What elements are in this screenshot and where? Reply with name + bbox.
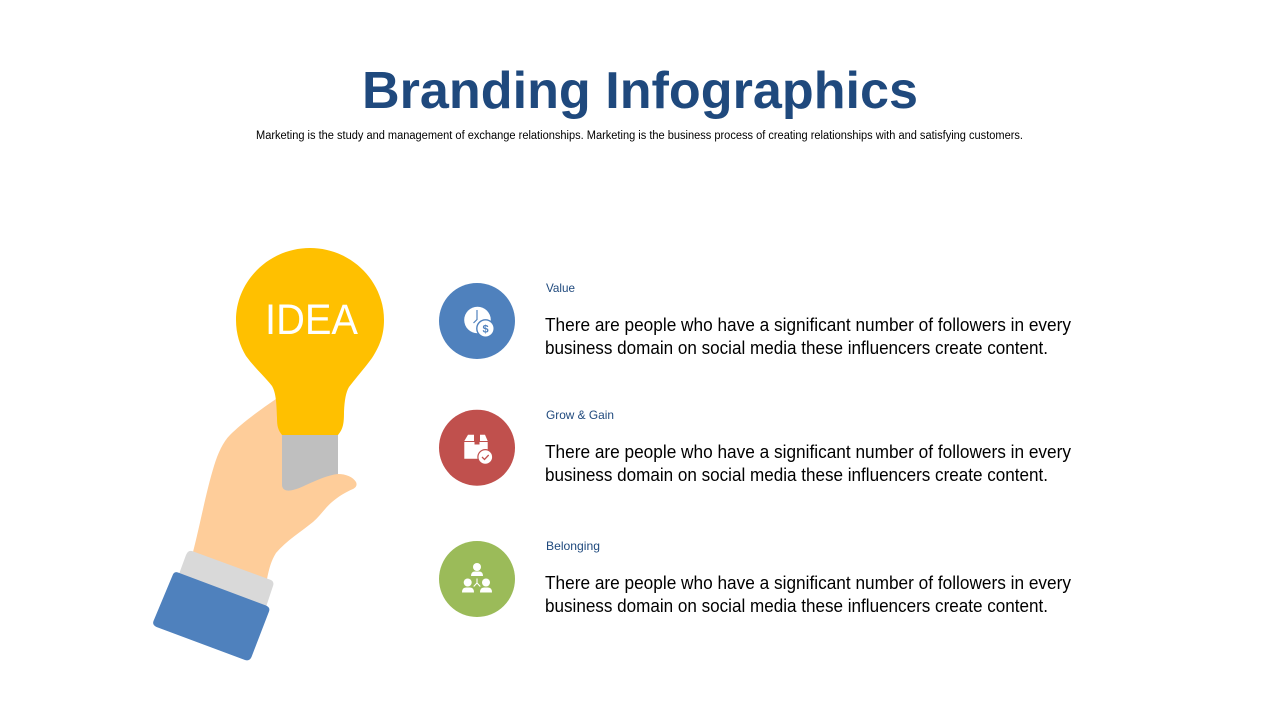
illustration: hand holding idea bulb	[153, 248, 384, 660]
item: grow and gain	[439, 408, 1071, 486]
label: Belonging	[546, 539, 600, 553]
description: There are people who have a significant number of followers in every	[545, 442, 1071, 462]
item: belonging	[439, 539, 1071, 617]
description: business domain on social media these influencers create content.	[545, 596, 1048, 616]
title: Branding Infographics	[362, 62, 918, 120]
jacket sleeve	[153, 572, 269, 660]
description: business domain on social media these influencers create content.	[545, 465, 1048, 485]
icon: clock and dollar	[439, 283, 515, 359]
label: Grow & Gain	[546, 408, 614, 422]
label: Value	[546, 281, 575, 295]
description: There are people who have a significant number of followers in every	[545, 315, 1071, 335]
icon: people network	[439, 541, 515, 617]
bulb glass	[236, 248, 384, 435]
icon: box with check	[439, 410, 515, 486]
subtitle: Marketing is the study and management of exchange relationships. Marketing is the business process of creating relationships with and satisfying customers.	[256, 130, 1023, 142]
bulb label: IDEA	[265, 296, 358, 344]
item: value	[439, 281, 1071, 359]
icon: clock and dollar: $	[482, 324, 489, 336]
description: business domain on social media these influencers create content.	[545, 338, 1048, 358]
hand	[193, 399, 357, 579]
description: There are people who have a significant number of followers in every	[545, 573, 1071, 593]
bulb base	[282, 430, 338, 491]
shirt cuff	[179, 551, 273, 607]
